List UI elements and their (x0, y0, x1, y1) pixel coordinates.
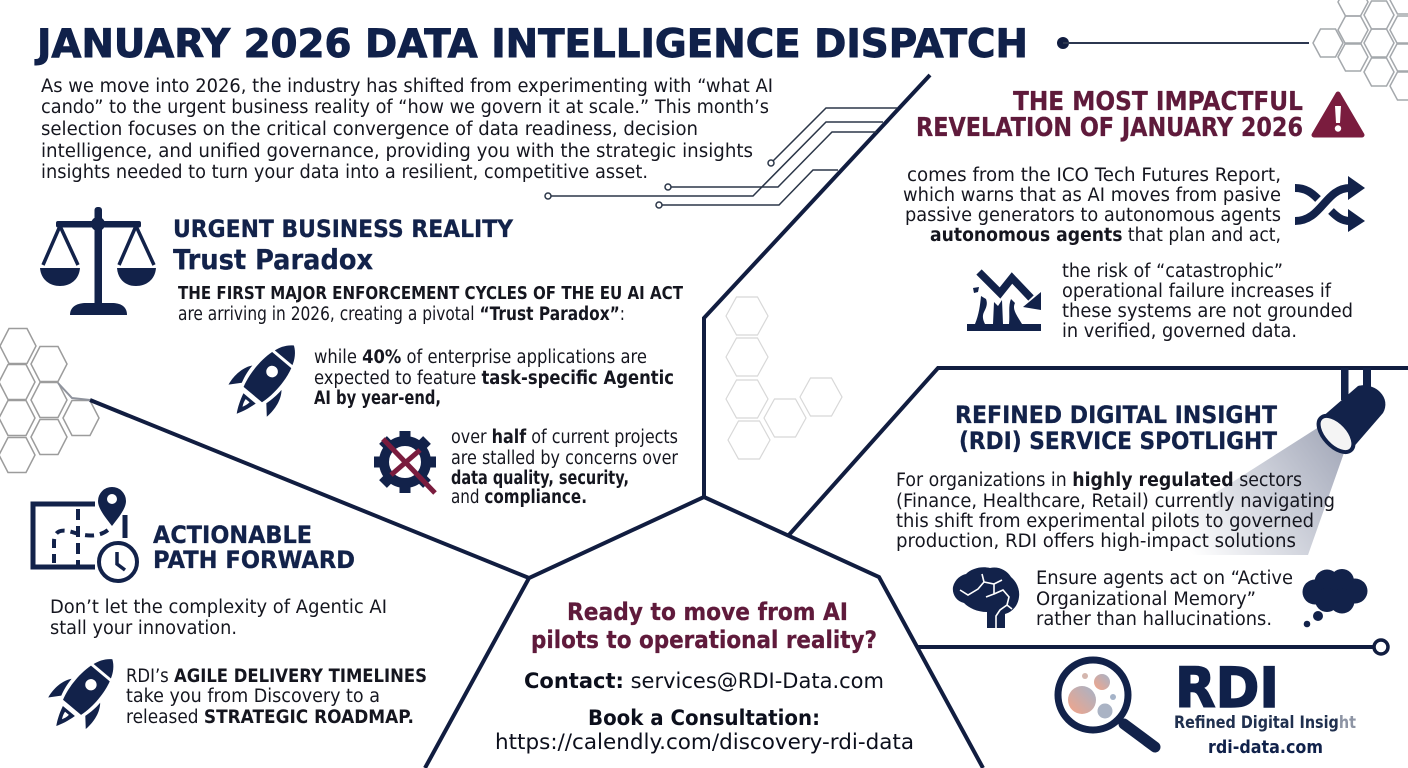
text: ICO tech futures report: which warns that as AI moves from pasive (903, 185, 1281, 206)
heading: RDI service spotlight: (RDI) SERVICE SPOTLIGHT (959, 427, 1278, 455)
heading: RDI service spotlight (955, 401, 1278, 455)
circuit lines (545, 108, 897, 208)
intro paragraph: insights needed to turn your data into a resilient, competitive asset. (41, 162, 648, 183)
text: catastrophic failure risk: operational failure increases if (1062, 281, 1331, 302)
hexagon pattern: top right (1313, 0, 1408, 100)
text: EU AI Act enforcement: are arriving in 2026, creating a pivotal “Trust Paradox”: (178, 304, 625, 325)
intro paragraph: selection focuses on the critical convergence of data readiness, decision (41, 119, 698, 140)
text: catastrophic failure risk: these systems are not grounded (1062, 301, 1353, 322)
logo text: RDI (1175, 656, 1279, 720)
heading: actionable path forward: ACTIONABLE (153, 521, 312, 549)
text: 40% of enterprise applications: AI by year-end, (314, 388, 441, 409)
icon: brain (953, 567, 1019, 628)
heading: urgent business reality: URGENT BUSINESS REALITY (173, 215, 514, 243)
consultation booking: Book a Consultation: (588, 706, 820, 730)
text: agile delivery timelines: released STRATEGIC ROADMAP. (126, 707, 414, 728)
hexagon pattern: centre (726, 297, 842, 459)
text: half of current projects: over half of current projects (451, 427, 678, 448)
consultation booking (495, 706, 914, 754)
text: half of current projects: are stalled by concerns over (451, 448, 678, 469)
title: JANUARY 2026 DATA INTELLIGENCE DISPATCH (34, 22, 1028, 67)
text: complexity of agentic AI: Don’t let the complexity of Agentic AI (50, 597, 387, 618)
logo: magnifying glass (1058, 660, 1155, 747)
intro paragraph (41, 76, 773, 183)
text: active organizational memory (1036, 568, 1293, 630)
call to action heading: Ready to move from AI (567, 598, 848, 626)
call to action heading (531, 598, 877, 654)
heading: actionable path forward (153, 521, 355, 574)
logo text: Refined Digital Insight (1174, 713, 1356, 732)
icon: rocket (37, 643, 132, 742)
heading: most impactful revelation: REVELATION OF JANUARY 2026 (916, 113, 1303, 143)
text: ICO tech futures report: comes from the ICO Tech Futures Report, (907, 165, 1281, 186)
text: regulated sectors: (Finance, Healthcare, Retail) currently navigating (896, 491, 1335, 512)
text: EU AI Act enforcement: THE FIRST MAJOR ENFORCEMENT CYCLES OF THE EU AI ACT (178, 284, 683, 304)
heading: RDI service spotlight: REFINED DIGITAL INSIGHT (955, 401, 1278, 429)
title rule with dot (1057, 37, 1309, 49)
text: ICO tech futures report: passive generators to autonomous agents (905, 205, 1281, 226)
icon: thought cloud (1302, 569, 1368, 627)
intro paragraph: cando” to the urgent business reality of “how we govern it at scale.” This month’s (41, 97, 769, 118)
logo text (1174, 656, 1356, 758)
text: half of current projects: data quality, security, (451, 468, 629, 489)
consultation booking: https://calendly.com/discovery-rdi-data (495, 730, 914, 754)
icon: map with pin and clock (33, 487, 137, 581)
text: ICO tech futures report (903, 165, 1281, 246)
text: active organizational memory: Organizational Memory” (1036, 589, 1256, 610)
divider with ring (917, 640, 1388, 654)
text: agile delivery timelines: RDI’s AGILE DELIVERY TIMELINES (126, 666, 427, 687)
text: regulated sectors: production, RDI offers high-impact solutions (896, 531, 1296, 552)
heading: most impactful revelation: THE MOST IMPACTFUL (1013, 87, 1303, 117)
icon: scales of justice (40, 207, 156, 315)
heading: most impactful revelation (916, 87, 1303, 143)
intro paragraph: As we move into 2026, the industry has shifted from experimenting with “what AI (41, 76, 773, 97)
text: agile delivery timelines (126, 666, 427, 728)
text: 40% of enterprise applications: expected to feature task-specific Agentic (314, 368, 674, 389)
icon: crossed gear (374, 431, 436, 493)
icon: warning triangle (1314, 94, 1362, 135)
text: catastrophic failure risk (1062, 261, 1353, 342)
icon: spotlight (1312, 368, 1385, 458)
text: half of current projects: and compliance. (451, 487, 587, 508)
text: regulated sectors: this shift from experimental pilots to governed (896, 511, 1314, 532)
heading: urgent business reality: Trust Paradox (173, 243, 373, 276)
text: agile delivery timelines: take you from Discovery to a (126, 686, 380, 707)
heading: urgent business reality (173, 215, 514, 276)
spotlight beam (1118, 425, 1345, 555)
text: complexity of agentic AI (50, 597, 387, 639)
heading: actionable path forward: PATH FORWARD (153, 546, 355, 574)
call to action heading: pilots to operational reality? (531, 626, 877, 654)
text: complexity of agentic AI: stall your innovation. (50, 618, 237, 639)
contact line: Contact: services@RDI-Data.com (524, 669, 884, 693)
text: active organizational memory: rather than hallucinations. (1036, 609, 1272, 630)
icon: shuffle arrows (1295, 176, 1365, 232)
hexagon pattern: left (0, 328, 99, 472)
text: ICO tech futures report: autonomous agents that plan and act, (930, 225, 1281, 246)
text: 40% of enterprise applications: while 40% of enterprise applications are (314, 347, 647, 368)
icon: crashing chart (967, 272, 1041, 331)
text: regulated sectors: For organizations in highly regulated sectors (896, 470, 1302, 491)
icon: rocket (217, 329, 314, 430)
intro paragraph: intelligence, and unified governance, providing you with the strategic insights (41, 141, 753, 162)
logo text: rdi-data.com (1208, 737, 1323, 758)
text: 40% of enterprise applications (314, 347, 674, 409)
text: catastrophic failure risk: in verified, governed data. (1062, 321, 1297, 342)
text: EU AI Act enforcement (178, 284, 683, 325)
text: half of current projects (451, 427, 678, 508)
text: regulated sectors (896, 470, 1335, 552)
text: active organizational memory: Ensure agents act on “Active (1036, 568, 1293, 589)
text: catastrophic failure risk: the risk of “catastrophic” (1062, 261, 1283, 282)
